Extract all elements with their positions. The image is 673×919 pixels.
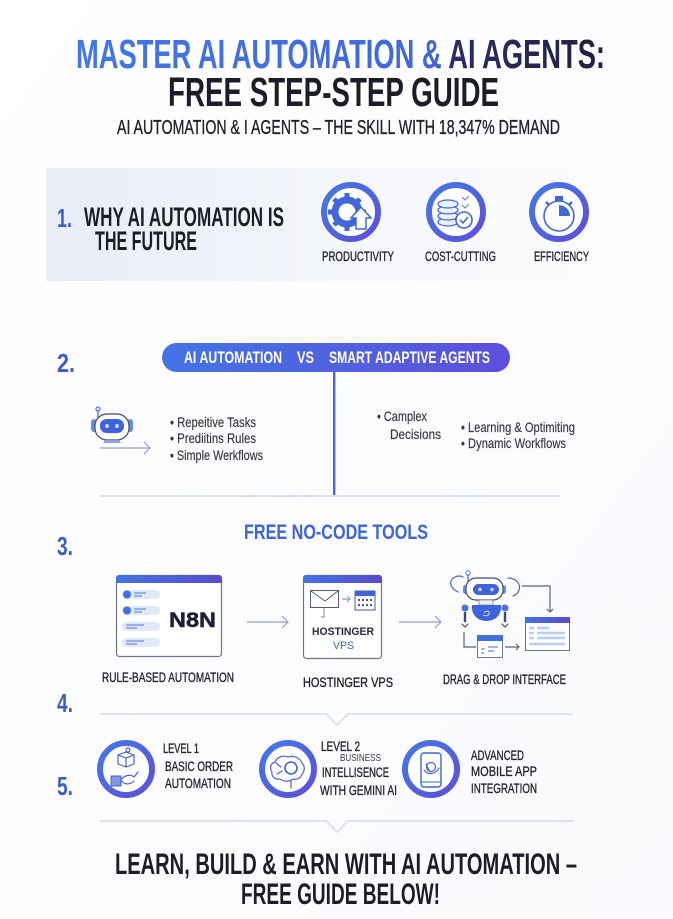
tool window: N8N [116,575,222,656]
icon: cost-cutting database [429,185,483,239]
section number 1: 1. [57,203,72,233]
title: FREE STEP-STEP GUIDE [168,69,499,115]
list: agent traits left: • Camplex [377,408,427,424]
advanced level text: MOBILE APP [471,763,537,779]
level 2 text: WITH GEMINI AI [320,782,397,798]
section number 4: 4. [57,688,73,718]
list: automation traits: • Simple Werkflows [170,447,263,463]
tool window: Hostinger VPS: HOSTINGER [312,626,374,638]
panel: why AI automation is the future [46,168,642,281]
level 2 text: LEVEL 2 [321,738,360,754]
comparison header pill: AI AUTOMATION [184,348,282,367]
icon: mobile app [405,743,457,795]
section number 5: 5. [57,771,73,801]
tool window: Hostinger VPS [303,575,382,658]
list: agent traits left: Decisions [390,426,441,442]
icon: brain with Gemini [262,743,314,795]
list: automation traits: • Repeitive Tasks [170,414,256,430]
icon: order automation [100,743,152,795]
panel heading: WHY AI AUTOMATION IS [84,202,284,232]
advanced level text: INTEGRATION [471,780,537,796]
title [76,31,605,115]
label: productivity: PRODUCTIVITY [322,248,394,264]
comparison header pill: VS [297,348,314,367]
list: automation traits [170,414,263,463]
icon: robot [91,407,133,443]
heading: free no-code tools: FREE NO-CODE TOOLS [244,521,428,544]
level 1 text: LEVEL 1 [163,740,199,756]
comparison header pill [162,343,510,372]
arrow: automation [100,442,150,454]
label: rule-based automation: RULE-BASED AUTOMATION [102,669,234,685]
level 1 text: BASIC ORDER [165,758,233,774]
level 1 [100,740,233,795]
label: hostinger vps: HOSTINGER VPS [303,674,393,690]
level 2 [262,738,397,798]
level 2 text: BUSINESS [340,753,381,764]
panel heading: THE FUTURE [95,226,197,256]
label: efficiency: EFFICIENCY [534,248,589,264]
section number 3: 3. [57,531,73,561]
label: cost-cutting: COST-CUTTING [425,248,496,264]
panel heading [84,202,284,256]
advanced level [405,743,537,796]
section number 2: 2. [57,348,75,378]
chevron divider [100,714,573,725]
list: agent traits right: • Dynamic Workflows [461,435,566,451]
icon: efficiency stopwatch [532,185,586,239]
tool window: Hostinger VPS: VPS [333,640,354,652]
list: agent traits right: • Learning & Optimiting [461,419,575,435]
label: drag and drop interface: DRAG & DROP INTERFACE [443,671,566,687]
comparison centre divider [333,372,335,496]
chevron divider [100,821,573,832]
tool window: N8N: N8N [169,609,216,632]
advanced level text [471,747,537,796]
call to action [115,848,577,911]
icon: robot with drag and drop workflow [451,571,570,658]
call to action: FREE GUIDE BELOW! [241,878,440,911]
level 2 text: INTELLISENCE [322,764,389,780]
arrow [247,616,288,628]
icon: productivity gear [324,185,378,239]
level 2 text [320,738,397,798]
level 1 text [163,740,233,791]
arrow [399,616,441,628]
comparison header pill: SMART ADAPTIVE AGENTS [329,348,490,367]
advanced level text: ADVANCED [471,747,524,763]
list: automation traits: • Prediitins Rules [170,430,256,446]
list: agent traits right [461,419,575,451]
list: agent traits left [377,408,441,442]
level 1 text: AUTOMATION [165,775,231,791]
